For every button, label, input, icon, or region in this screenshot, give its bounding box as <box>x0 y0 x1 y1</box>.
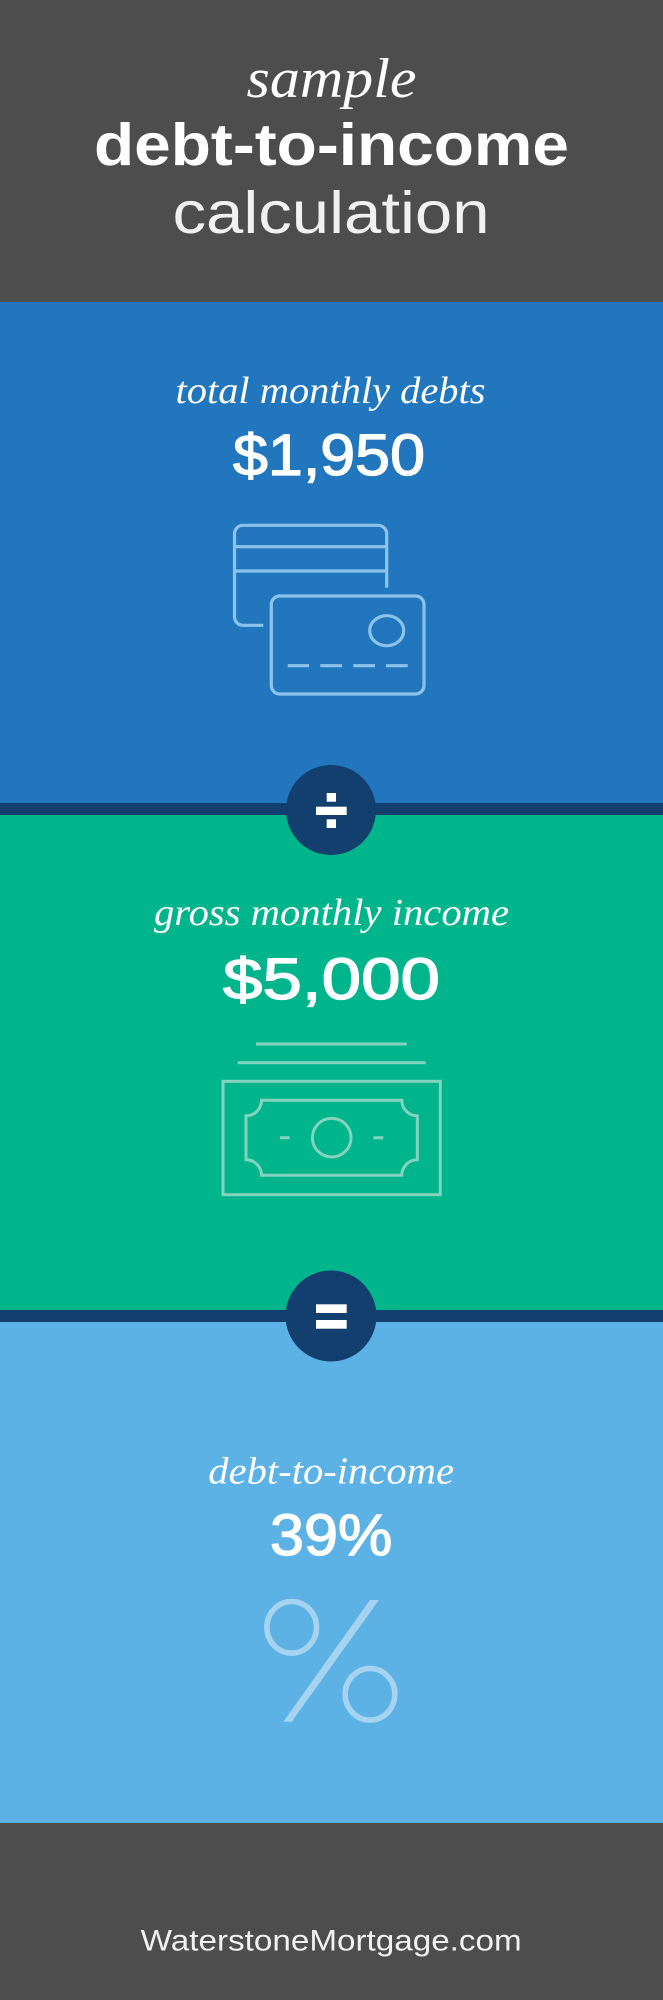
icon: credit cards <box>234 525 424 694</box>
panel: footer <box>0 1823 663 2000</box>
label: total monthly debts: total monthly debts <box>176 370 486 412</box>
divider bar with equals symbol <box>0 1270 663 1362</box>
value: $5,000: $5,000 <box>223 947 440 1012</box>
panel: header <box>0 0 663 302</box>
value: $1,950: $1,950 <box>233 423 425 488</box>
icon: percent sign <box>267 1600 395 1722</box>
panel: gross monthly income <box>0 815 663 1311</box>
icon: equals sign <box>316 1304 347 1329</box>
divider bar with divide symbol <box>0 765 663 855</box>
title line: sample: sample <box>246 48 416 110</box>
title line: calculation: calculation <box>172 180 490 246</box>
label: debt-to-income: debt-to-income <box>208 1450 454 1492</box>
panel: debt-to-income result <box>0 1322 663 1824</box>
icon: divide sign <box>316 793 347 828</box>
icon: banknote stack <box>223 1044 440 1195</box>
label: gross monthly income: gross monthly income <box>154 892 509 934</box>
value: 39%: 39% <box>270 1503 392 1568</box>
website address: WaterstoneMortgage.com <box>141 1925 522 1958</box>
panel: total monthly debts <box>0 302 663 803</box>
title line: debt-to-income: debt-to-income <box>94 112 569 178</box>
